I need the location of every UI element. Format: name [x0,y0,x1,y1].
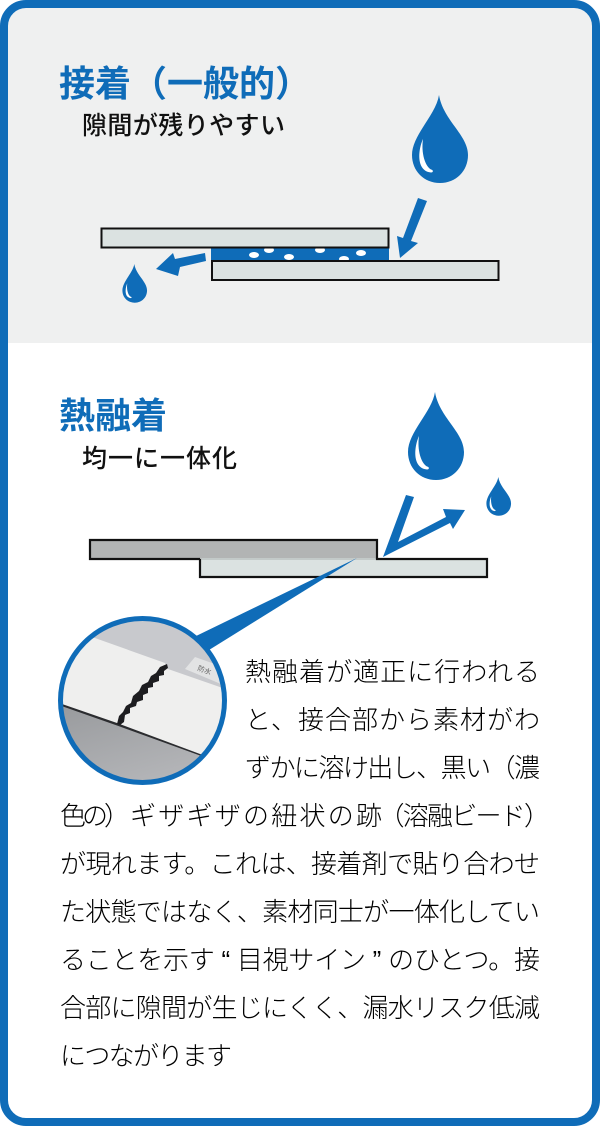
body text: と、接合部から素材がわ [245,705,540,735]
subheading: uniform integration: 均一に一体化 [82,445,237,473]
icon: large water drop [408,392,464,480]
adhesive layer with voids [211,248,389,260]
callout wedge [194,558,357,650]
lower plate [212,261,498,280]
fused plates [90,540,487,577]
body text: ギザギザの紐状の跡 [130,801,382,831]
body text: が現れます。これは、接着剤で貼り合わせ [60,849,540,879]
arrow: water leaking out [156,253,206,276]
panel: general adhesive [4,4,596,343]
body text: ることを示す “ 目視サイン ” のひとつ。接 [60,945,540,975]
photo callout: weld bead [58,616,227,785]
subheading: gaps remain: 隙間が残りやすい [82,112,285,140]
icon: large water drop [412,95,468,183]
body text [60,657,550,1071]
photo callout: weld bead: 防水 [196,663,213,677]
heading: heat fusion: 熱融着 [59,395,167,436]
arrow: water entering the joint [397,198,427,258]
panel: heat fusion [50,392,550,1071]
panel background [4,4,596,343]
body text: 熱融着が適正に行われる [245,657,540,687]
body text: 合部に隙間が生じにくく、漏水リスク低減 [60,993,540,1023]
icon: small deflected drop [486,477,511,516]
body text: た状態ではなく、素材同士が一体化してい [60,897,540,927]
body text: ずかに溶け出し、黒い（濃 [245,753,540,783]
body text: 色の） [60,801,130,831]
arrow: water deflected [383,495,465,557]
body text: （溶融ビード） [378,801,550,831]
upper plate [102,228,388,248]
body text: につながります [60,1041,232,1071]
icon: small leaking drop [122,264,147,303]
heading: adhesive: 接着（一般的） [59,63,311,104]
